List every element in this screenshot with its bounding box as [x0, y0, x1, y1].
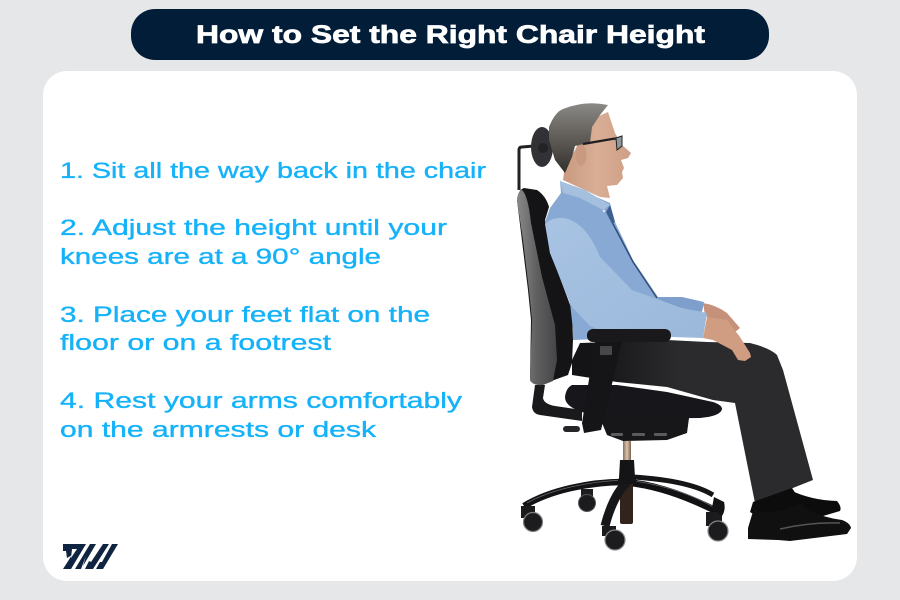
chair base and casters — [521, 477, 728, 550]
torso shirt — [545, 181, 680, 340]
step 2 — [60, 215, 447, 269]
step 2: 2. Adjust the height until your — [60, 215, 447, 240]
step 1: 1. Sit all the way back in the chair — [60, 158, 486, 183]
step 2: knees are at a 90° angle — [60, 244, 381, 269]
step 4 — [60, 388, 462, 442]
icon: brand logo — [63, 544, 118, 569]
step 3 — [60, 302, 430, 355]
step 4: on the armrests or desk — [60, 417, 377, 442]
seat mechanism — [532, 385, 689, 441]
near hand — [703, 317, 751, 361]
far shoe — [790, 490, 841, 516]
near shoe — [748, 503, 851, 541]
collar — [560, 181, 615, 224]
gas cylinder — [616, 441, 638, 484]
illustration: man seated on office chair — [517, 103, 851, 550]
sock — [750, 488, 802, 518]
seat cushion — [565, 385, 722, 419]
neck and face — [563, 112, 631, 198]
forward arm sleeve — [545, 218, 707, 338]
armrest — [582, 329, 671, 433]
ear — [576, 144, 586, 166]
glasses — [583, 136, 622, 150]
hair — [549, 103, 608, 173]
far sleeve — [655, 297, 704, 312]
placket shadow line — [612, 222, 657, 298]
steps text block — [60, 158, 486, 442]
title banner: How to Set the Right Chair Height — [196, 21, 706, 49]
title banner — [131, 9, 769, 60]
headrest — [519, 127, 553, 190]
chair backrest — [517, 188, 573, 385]
trousers — [572, 340, 813, 503]
step 3: 3. Place your feet flat on the — [60, 302, 430, 327]
step 4: 4. Rest your arms comfortably — [60, 388, 462, 413]
panel: main card — [43, 71, 857, 581]
far hand — [703, 303, 740, 336]
step 3: floor or on a footrest — [60, 330, 331, 355]
